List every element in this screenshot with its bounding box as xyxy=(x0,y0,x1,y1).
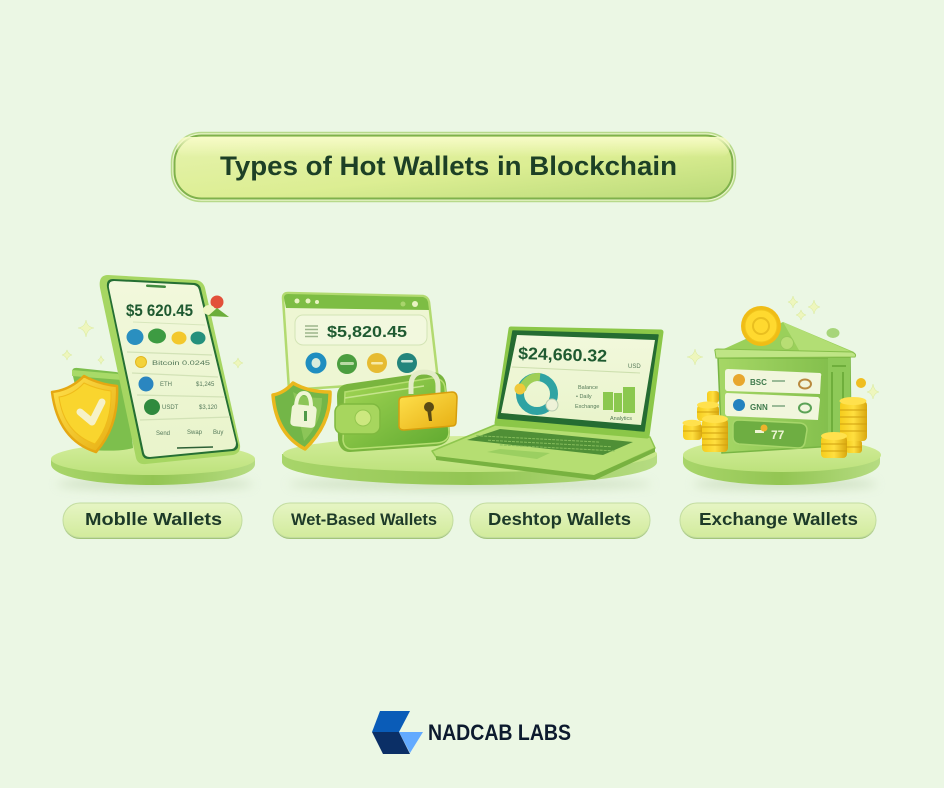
exchange wallet illustration xyxy=(682,296,881,490)
bar chart xyxy=(603,387,635,413)
big coin xyxy=(741,306,781,346)
exchange button: 77 xyxy=(771,428,785,442)
phone rows: $1,245 xyxy=(196,382,215,388)
label: desktop wallets: Deshtop Wallets xyxy=(488,509,631,529)
label: desktop wallets xyxy=(470,503,650,539)
icon: padlock xyxy=(399,372,457,430)
exchange rows xyxy=(725,369,821,420)
phone rows: Bitcoin 0.0245 xyxy=(152,361,211,367)
web coins xyxy=(306,352,417,374)
platform: mobile xyxy=(51,443,255,485)
sparkles: exchange xyxy=(687,296,879,399)
laptop: Balance xyxy=(578,385,598,391)
phone rows: Buy xyxy=(213,430,223,436)
label: web-based wallets xyxy=(273,503,453,539)
platform: web and desktop xyxy=(282,436,657,485)
wallet behind shield xyxy=(72,368,133,451)
phone coins xyxy=(126,328,206,345)
phone rows: $3,120 xyxy=(199,405,218,411)
wallet clasp xyxy=(335,404,380,434)
phone rows: ETH xyxy=(160,382,172,388)
label: mobile wallets xyxy=(63,503,242,539)
logo mark xyxy=(372,711,423,754)
logo: Nadcab Labs xyxy=(372,711,571,754)
mobile wallet illustration xyxy=(51,275,255,490)
icon: notification badge xyxy=(203,296,229,317)
phone rows: Send xyxy=(156,431,170,437)
label: web-based wallets: Wet-Based Wallets xyxy=(291,510,437,529)
laptop base xyxy=(432,425,655,476)
phone rows: USDT xyxy=(162,405,179,411)
label: exchange wallets: Exchange Wallets xyxy=(699,509,858,529)
phone balance: $5 620.45 xyxy=(126,302,193,320)
phone rows: Swap xyxy=(187,430,203,436)
laptop xyxy=(432,329,661,480)
donut chart xyxy=(514,377,558,411)
title banner: Types of Hot Wallets in Blockchain xyxy=(220,151,677,181)
coin stacks: right xyxy=(821,397,867,458)
web balance: $5,820.45 xyxy=(327,324,407,341)
wallet xyxy=(335,372,450,452)
exchange rows: BSC xyxy=(750,378,767,387)
exchange building xyxy=(715,306,866,453)
coin stacks: left xyxy=(682,391,728,452)
exchange rows: GNN xyxy=(750,403,768,412)
platform: exchange xyxy=(683,438,881,485)
label: exchange wallets xyxy=(680,503,876,539)
laptop: Exchange xyxy=(575,404,599,410)
web and desktop wallet illustration xyxy=(273,293,661,490)
phone rows xyxy=(127,352,230,448)
title banner xyxy=(172,132,736,202)
phone xyxy=(100,275,240,464)
laptop: • Daily xyxy=(576,394,592,400)
browser window xyxy=(283,293,438,390)
laptop balance: $24,660.32 xyxy=(518,344,607,366)
icon: lock shield xyxy=(273,383,330,449)
sparkles: mobile xyxy=(62,320,243,368)
label: mobile wallets: Moblle Wallets xyxy=(85,509,222,529)
laptop: USD xyxy=(628,364,641,370)
laptop screen xyxy=(497,329,661,436)
laptop: Analytics xyxy=(610,416,632,422)
exchange button xyxy=(733,420,807,448)
logo: Nadcab Labs: NADCAB LABS xyxy=(428,720,571,745)
icon: gold shield with check xyxy=(52,376,117,452)
